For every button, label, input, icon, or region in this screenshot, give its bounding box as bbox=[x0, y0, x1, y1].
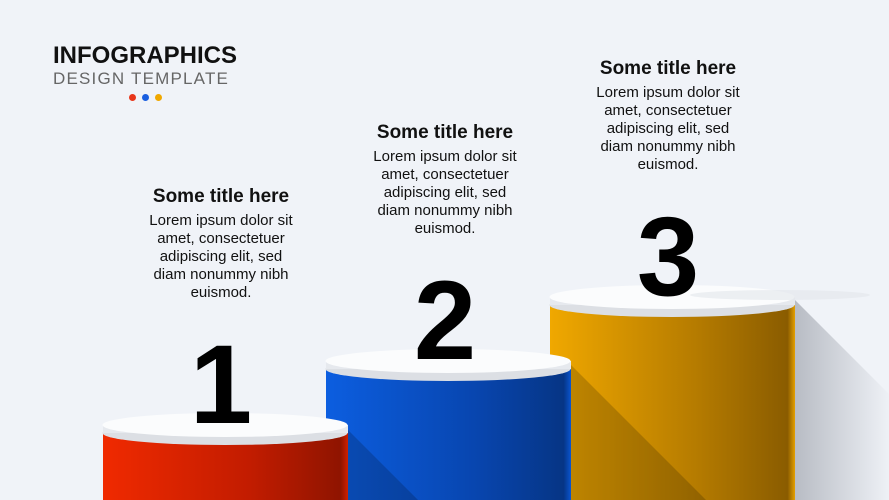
title: DESIGN TEMPLATE bbox=[53, 69, 229, 88]
text block 1 bbox=[149, 186, 293, 301]
text block 2: Lorem ipsum dolor sit bbox=[373, 148, 517, 165]
text block 3 bbox=[596, 58, 740, 173]
text block 2: amet, consectetuer bbox=[381, 166, 509, 183]
text block 3: amet, consectetuer bbox=[604, 102, 732, 119]
shadow: pillar 1 bbox=[348, 428, 420, 500]
text block 1: adipiscing elit, sed bbox=[160, 248, 282, 265]
shadow: pillar 3 bbox=[795, 300, 889, 500]
dots bbox=[129, 94, 162, 101]
text block 1: Some title here bbox=[153, 186, 289, 207]
text block 1: euismod. bbox=[191, 284, 251, 301]
number 3: 3 bbox=[637, 194, 699, 319]
number 2: 2 bbox=[414, 258, 476, 383]
number 1: 1 bbox=[190, 322, 252, 447]
text block 3: Lorem ipsum dolor sit bbox=[596, 84, 740, 101]
text block 2: euismod. bbox=[415, 220, 475, 237]
text block 2 bbox=[373, 122, 517, 237]
text block 2: diam nonummy nibh bbox=[377, 202, 513, 219]
pillar 2 bbox=[326, 349, 571, 500]
text block 1: diam nonummy nibh bbox=[153, 266, 289, 283]
text block 3: diam nonummy nibh bbox=[600, 138, 736, 155]
text block 1: Lorem ipsum dolor sit bbox=[149, 212, 293, 229]
text block 3: Some title here bbox=[600, 58, 736, 79]
text block 1: amet, consectetuer bbox=[157, 230, 285, 247]
shadow: pillar 2 bbox=[571, 365, 710, 500]
text block 3: adipiscing elit, sed bbox=[607, 120, 729, 137]
pillar 3 bbox=[550, 285, 870, 500]
title bbox=[53, 42, 237, 101]
text block 3: euismod. bbox=[638, 156, 698, 173]
text block 2: adipiscing elit, sed bbox=[384, 184, 506, 201]
text block 2: Some title here bbox=[377, 122, 513, 143]
pillar 1 bbox=[102, 413, 348, 500]
title: INFOGRAPHICS bbox=[53, 42, 237, 69]
